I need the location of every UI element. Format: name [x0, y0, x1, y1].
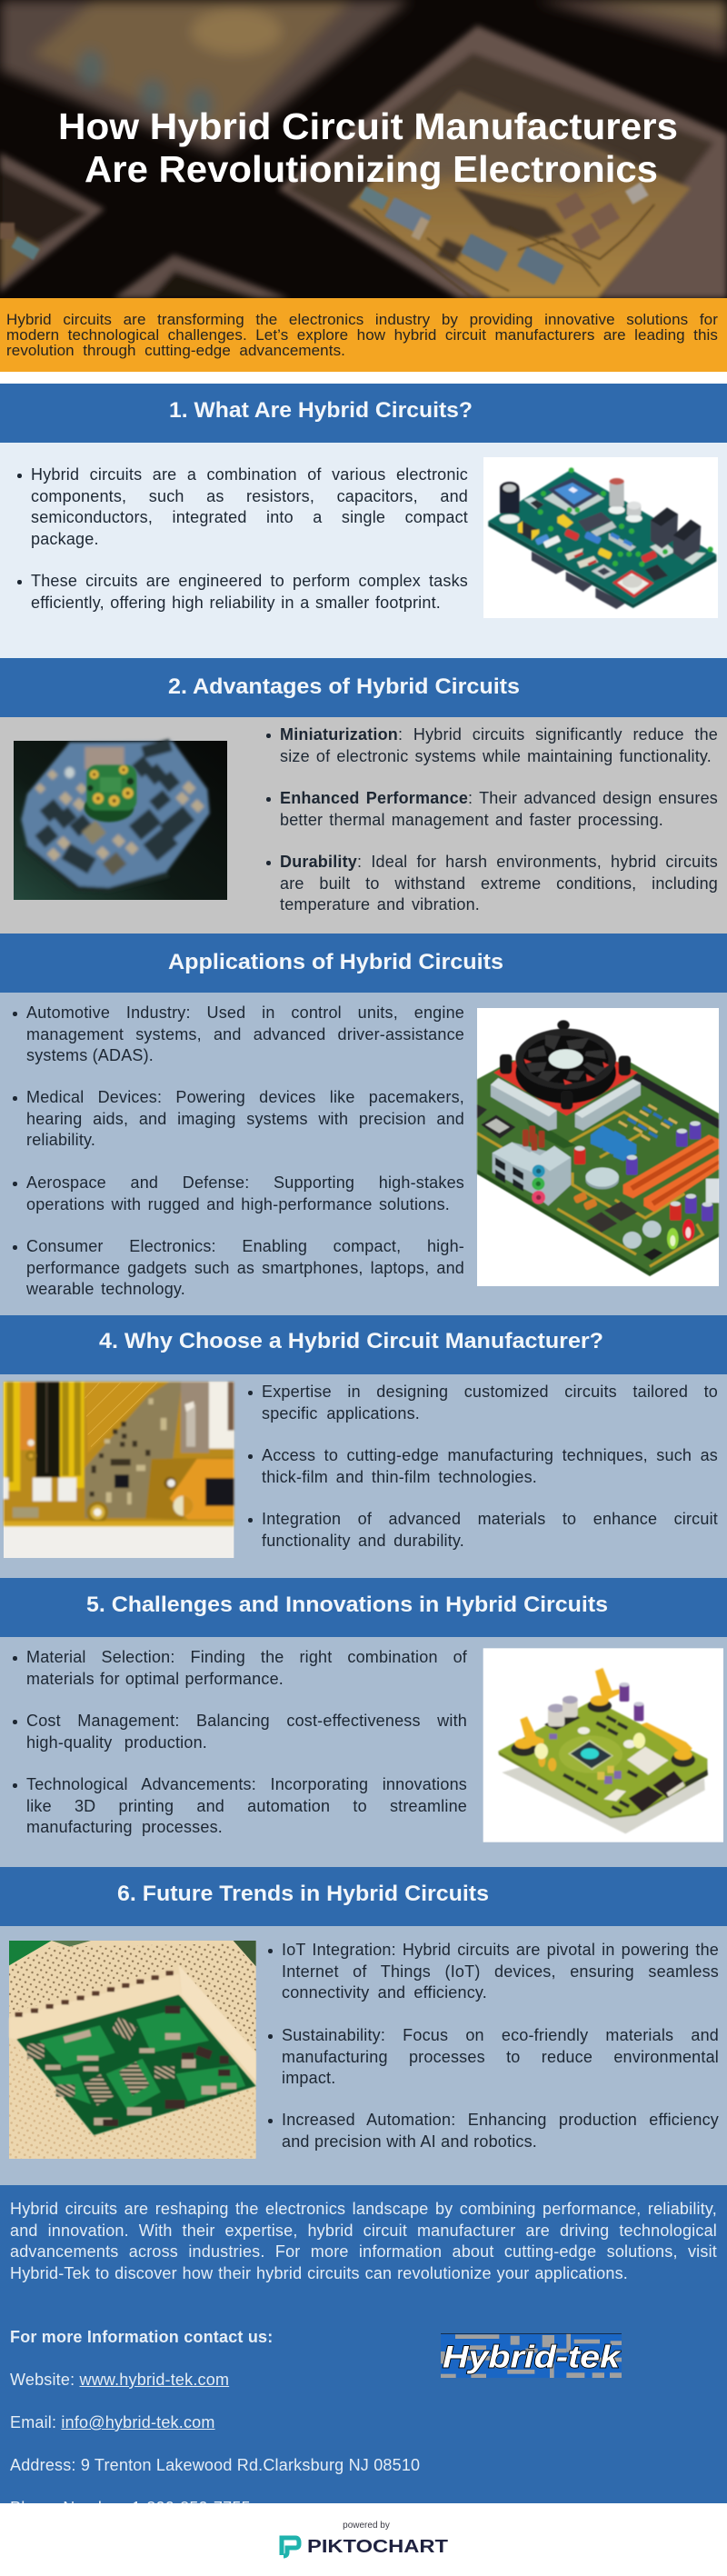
- text: point one: semiconductors, integrated into a single compact: [31, 508, 468, 526]
- panel: what are hybrid circuits: [0, 443, 727, 658]
- title: Are Revolutionizing Electronics: [85, 148, 658, 190]
- text: automotive: systems (ADAS).: [26, 1046, 154, 1064]
- text: increased automation: Increased Automation: Enhancing production efficiency: [282, 2111, 719, 2129]
- text: iot integration: IoT Integration: Hybrid circuits are pivotal in powering the: [282, 1941, 719, 1959]
- closing paragraph: advancements across industries. For more information about cutting-edge solutions, visit: [10, 2242, 717, 2261]
- closing paragraph: Hybrid circuits are reshaping the electronics landscape by combining performance, reliability,: [10, 2200, 717, 2218]
- footer: powered by Piktochart: PIKTOCHART: [307, 2537, 448, 2557]
- text: automotive: [13, 1003, 464, 1064]
- contact heading: For more Information contact us:: [10, 2328, 273, 2346]
- text: increased automation: and precision with AI and robotics.: [282, 2132, 537, 2151]
- text: point one: Hybrid circuits are a combination of various electronic: [31, 465, 468, 484]
- text: point one: components, such as resistors, capacitors, and: [31, 487, 468, 505]
- text: durability: temperature and vibration.: [280, 895, 480, 914]
- text: point two: [17, 572, 468, 612]
- text: cost management: Cost Management: Balancing cost-effectiveness with: [26, 1712, 467, 1730]
- text: aerospace: [13, 1173, 464, 1213]
- text: automotive: Automotive Industry: Used in control units, engine: [26, 1003, 464, 1022]
- text: cost management: high-quality production.: [26, 1732, 207, 1751]
- image: motherboard with cooling fan: [476, 1008, 720, 1286]
- text: point one: [17, 465, 468, 548]
- text: consumer: wearable technology.: [26, 1280, 185, 1298]
- contact: phone number: Phone Number: 1-800-850-7755: [10, 2499, 251, 2517]
- text: enhanced performance: better thermal management and faster processing.: [280, 811, 663, 829]
- text: expertise: specific applications.: [262, 1403, 420, 1422]
- text: aerospace: Aerospace and Defense: Supporting high-stakes: [26, 1173, 464, 1192]
- text: cost management: [13, 1712, 467, 1752]
- text: miniaturization: [266, 725, 718, 765]
- text: sustainability: impact.: [282, 2069, 335, 2087]
- intro text: modern technological challenges. Let’s explore how hybrid circuit manufacturers are leading this: [6, 326, 718, 344]
- text: medical: Medical Devices: Powering devices like pacemakers,: [26, 1088, 464, 1106]
- text: increased automation: [268, 2111, 719, 2151]
- intro text: [6, 311, 718, 359]
- section 6 header: [0, 1867, 727, 1926]
- text: integration: [248, 1510, 718, 1550]
- panel: applications: [0, 993, 727, 1315]
- image: round hybrid circuit photograph: [14, 736, 227, 900]
- panel: challenges and innovations: [0, 1637, 727, 1867]
- text: iot integration: connectivity and efficiency.: [282, 1983, 487, 2002]
- text: integration: functionality and durability.: [262, 1531, 464, 1549]
- text: material selection: materials for optimal performance.: [26, 1669, 284, 1687]
- text: point one: package.: [31, 529, 99, 547]
- text: technological advancements: manufacturing processes.: [26, 1818, 223, 1836]
- footer panel: [0, 2185, 727, 2503]
- section 4 header: 4. Why Choose a Hybrid Circuit Manufacturer?: [99, 1329, 603, 1353]
- panel: advantages: [0, 717, 727, 934]
- section 3 header: Applications of Hybrid Circuits: [168, 950, 503, 974]
- text: automotive: management systems, and advanced driver-assistance: [26, 1025, 464, 1043]
- intro text: Hybrid circuits are transforming the electronics industry by providing innovative solutions for: [6, 311, 718, 328]
- text: iot integration: Internet of Things (IoT) devices, ensuring seamless: [282, 1962, 719, 1980]
- closing paragraph: Hybrid-Tek to discover how their hybrid circuits can revolutionize your applications.: [10, 2263, 628, 2281]
- section 1 header: [0, 384, 727, 443]
- text: durability: [266, 853, 718, 914]
- image: isometric board with robot arms: [483, 1648, 723, 1842]
- section 6 header: 6. Future Trends in Hybrid Circuits: [117, 1882, 489, 1906]
- text: sustainability: Sustainability: Focus on eco-friendly materials and: [282, 2026, 719, 2044]
- text: access: thick-film and thin-film technologies.: [262, 1467, 537, 1485]
- section 5 header: [0, 1578, 727, 1637]
- panel: future trends: [0, 1926, 727, 2185]
- section 2 header: [0, 658, 727, 717]
- text: point two: These circuits are engineered to perform complex tasks: [31, 572, 468, 590]
- text: medical: reliability.: [26, 1131, 95, 1149]
- text: consumer: performance gadgets such as smartphones, laptops, and: [26, 1258, 464, 1276]
- title: [58, 105, 678, 190]
- title: How Hybrid Circuit Manufacturers: [58, 105, 678, 147]
- intro band: [0, 298, 727, 372]
- text: technological advancements: [13, 1775, 467, 1836]
- section 2 header: 2. Advantages of Hybrid Circuits: [168, 674, 520, 699]
- footer: powered by Piktochart: powered by: [343, 2521, 390, 2531]
- section 5 header: 5. Challenges and Innovations in Hybrid Circuits: [86, 1593, 608, 1617]
- image: beige socket with green circuit board: [8, 1941, 256, 2159]
- text: expertise: Expertise in designing customized circuits tailored to: [262, 1383, 718, 1401]
- text: sustainability: [268, 2026, 719, 2087]
- text: access: [248, 1446, 718, 1486]
- contact: email: Email: info@hybrid-tek.com: [10, 2413, 215, 2431]
- text: material selection: [13, 1648, 467, 1688]
- logo: Hybrid-tek: [441, 2333, 622, 2378]
- text: durability: are built to withstand extreme conditions, including: [280, 874, 718, 893]
- panel: why choose: [0, 1374, 727, 1578]
- text: iot integration: [268, 1941, 719, 2002]
- text: point two: efficiently, offering high reliability in a smaller footprint.: [31, 593, 441, 611]
- text: medical: hearing aids, and imaging systems with precision and: [26, 1109, 464, 1127]
- intro text: revolution through cutting-edge advancements.: [6, 342, 345, 359]
- text: technological advancements: Technological Advancements: Incorporating innovations: [26, 1775, 467, 1793]
- section 3 header: [0, 934, 727, 993]
- text: medical: [13, 1088, 464, 1149]
- text: technological advancements: like 3D printing and automation to streamline: [26, 1796, 467, 1814]
- image: gold circuit board close-up: [2, 1380, 236, 1558]
- text: material selection: Material Selection: Finding the right combination of: [26, 1648, 467, 1666]
- footer: powered by Piktochart: [0, 2503, 727, 2576]
- section 1 header: 1. What Are Hybrid Circuits?: [169, 398, 473, 423]
- text: consumer: Consumer Electronics: Enabling compact, high-: [26, 1237, 464, 1255]
- text: integration: Integration of advanced materials to enhance circuit: [262, 1510, 718, 1528]
- text: consumer: [13, 1237, 464, 1298]
- closing paragraph: and innovation. With their expertise, hybrid circuit manufacturer are driving technological: [10, 2222, 717, 2240]
- logo: Hybrid-tek: Hybrid-tek: [443, 2340, 622, 2374]
- closing paragraph: [10, 2200, 717, 2282]
- image: isometric green circuit board: [483, 457, 718, 618]
- text: enhanced performance: Enhanced Performance: Their advanced design ensures: [280, 789, 718, 807]
- text: sustainability: manufacturing processes to reduce environmental: [282, 2047, 719, 2065]
- hero: blurred photograph of hybrid circuit packages: [0, 0, 727, 298]
- section 4 header: [0, 1315, 727, 1374]
- text: expertise: [248, 1383, 718, 1423]
- text: durability: Durability: Ideal for harsh environments, hybrid circuits: [280, 853, 718, 871]
- text: aerospace: operations with rugged and high-performance solutions.: [26, 1194, 450, 1213]
- text: access: Access to cutting-edge manufacturing techniques, such as: [262, 1446, 718, 1464]
- text: miniaturization: Miniaturization: Hybrid circuits significantly reduce the: [280, 725, 718, 744]
- contact: website: Website: www.hybrid-tek.com: [10, 2371, 229, 2389]
- soft upper area of the main package: [382, 95, 636, 186]
- contact: address: Address: 9 Trenton Lakewood Rd.Clarksburg NJ 08510: [10, 2456, 420, 2474]
- text: miniaturization: size of electronic systems while maintaining functionality.: [280, 747, 712, 765]
- text: enhanced performance: [266, 789, 718, 829]
